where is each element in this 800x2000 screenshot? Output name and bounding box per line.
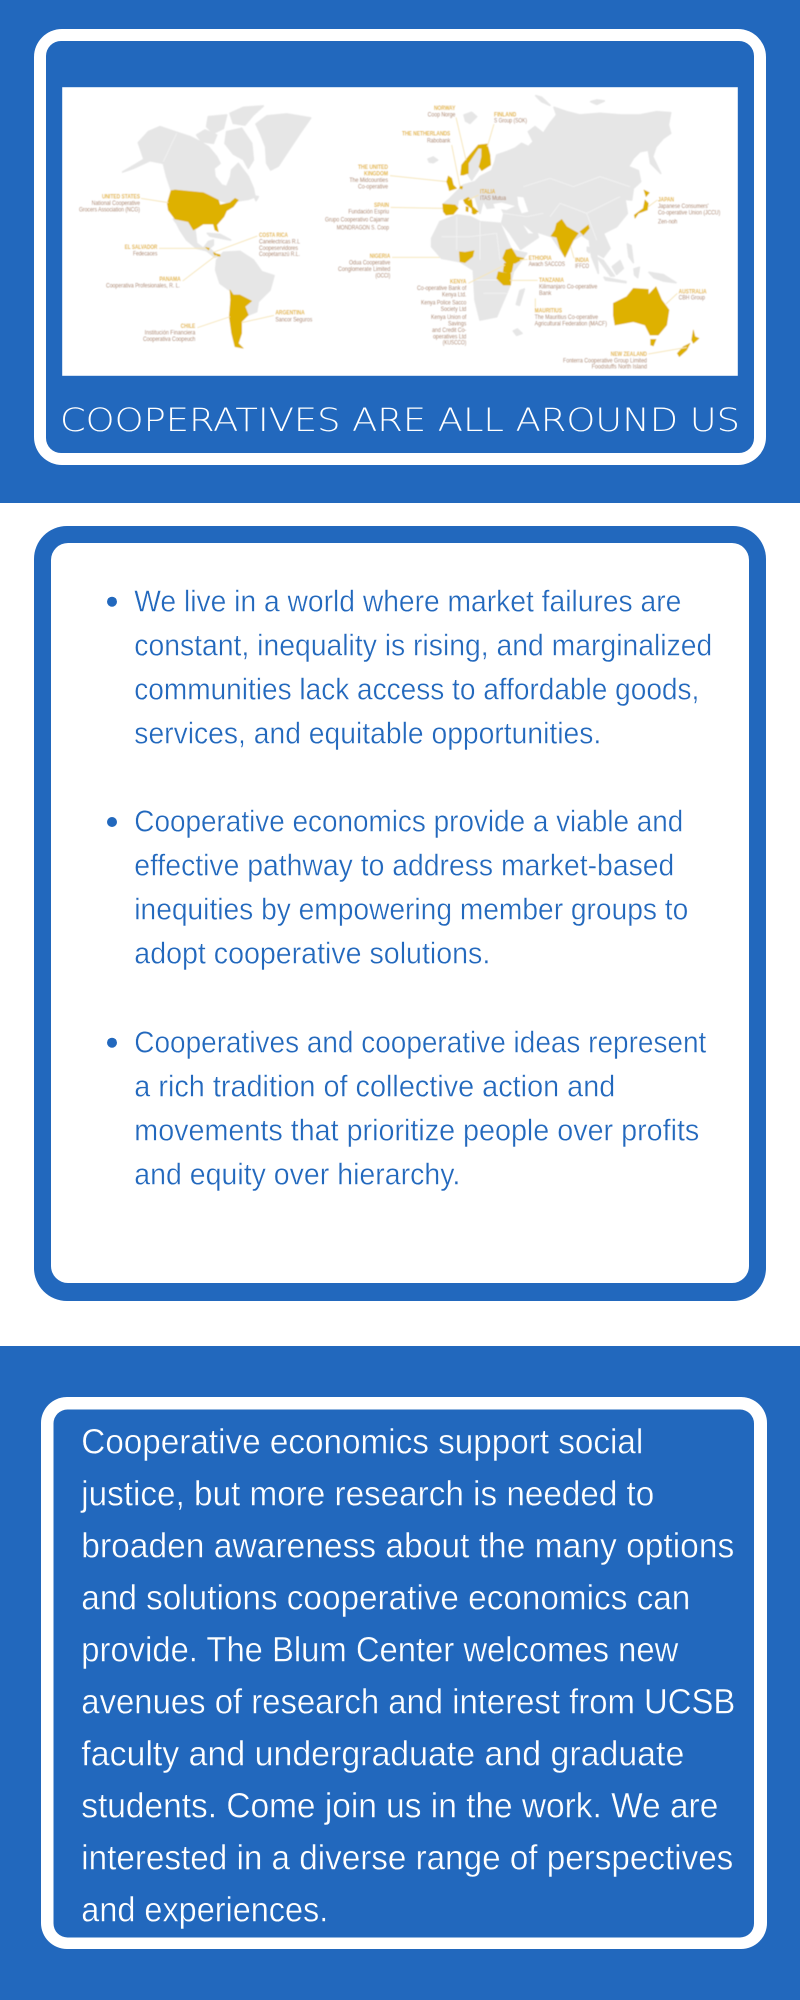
callout: El Salvador: Fedecaces (133, 250, 157, 257)
Spain highlighted (443, 204, 458, 215)
callout: Tanzania (510, 277, 598, 297)
callout: Mauritius (535, 298, 607, 327)
callout: Mauritius: The Mauritius Co-operative (535, 314, 598, 321)
callout: Nigeria: Conglomerate Limited (338, 266, 391, 273)
callout: United Kingdom: THE UNITED (358, 164, 388, 171)
callout: Panama (106, 255, 217, 290)
bullet: market failures: communities lack access to affordable goods, (134, 672, 699, 707)
callout: Kenya: Kenya Ltd. (442, 292, 467, 299)
call to action text (80, 1422, 735, 1929)
callout: Italia: ITAS Mutua (480, 195, 506, 202)
callout: Kenya: Co-operative Bank of (417, 285, 467, 292)
callout: United States (79, 194, 168, 213)
call to action text: broaden awareness about the many options (81, 1526, 734, 1565)
bullet: viable pathway: effective pathway to address market-based (134, 848, 674, 883)
world map (62, 87, 738, 376)
callout: Kenya: Kenya Police Sacco (421, 299, 467, 306)
panel: call to action (41, 1397, 767, 1949)
callout: The Netherlands: THE NETHERLANDS (402, 131, 450, 138)
callout: Japan: Co-operative Union (JCCU) (658, 209, 720, 216)
callout: Costa Rica (213, 232, 300, 258)
callout: Chile: CHILE (181, 323, 195, 330)
El Salvador, Costa Rica and Panama highlighted (206, 247, 220, 256)
callout: New Zealand: NEW ZEALAND (611, 351, 647, 358)
callout: Australia: AUSTRALIA (679, 288, 707, 295)
callout: Spain: Grupo Cooperativo Cajamar (325, 217, 389, 224)
callout: Australia (666, 288, 707, 304)
callout: Spain: MONDRAGON S. Coop (337, 225, 389, 232)
call to action text: justice, but more research is needed to (80, 1474, 654, 1513)
callout: Norway (428, 105, 466, 160)
top banner (0, 0, 800, 503)
callout: Kenya (417, 265, 505, 347)
callout: Nigeria: NIGERIA (370, 253, 391, 260)
callout: New Zealand: Foodstuffs North Island (592, 364, 647, 371)
callout: Tanzania: TANZANIA (539, 277, 564, 284)
bullet: rich tradition (107, 1025, 707, 1192)
bullet: market failures (107, 584, 712, 751)
callout: Ethiopia: Awach SACCOS (529, 261, 565, 268)
India highlighted (551, 219, 589, 257)
callout: Kenya: (KUSCCO) (443, 340, 466, 347)
callout: Ethiopia (520, 255, 565, 268)
callout: Italia: ITALIA (480, 189, 496, 196)
callout: New Zealand: Fonterra Cooperative Group Limited (563, 357, 647, 364)
call to action text: Cooperative economics support social (81, 1422, 643, 1461)
callout: Costa Rica: Coopeservidores (259, 245, 298, 252)
South America land (216, 251, 274, 315)
callout: Kenya: Savings (448, 320, 466, 327)
callout: India (571, 247, 589, 270)
callout: Kenya: and Credit Co- (432, 327, 466, 334)
callout: Nigeria: (OCCI) (375, 272, 390, 279)
Italy highlighted (463, 197, 478, 214)
bullet: market failures: services, and equitable opportunities. (134, 716, 601, 751)
map: Eurasia, Africa and Oceania (402, 96, 720, 371)
callout: Panama: Cooperativa Profesionales, R. L. (106, 283, 180, 290)
callout: India: INDIA (575, 257, 589, 264)
callout: Kenya: KENYA (450, 279, 467, 286)
callout: Ethiopia: ETHIOPIA (529, 255, 552, 262)
callout: New Zealand (563, 347, 687, 371)
callout: Australia: CBH Group (679, 295, 705, 302)
callout: Chile: Cooperativa Coopeuch (143, 336, 196, 343)
title: COOPERATIVES ARE ALL AROUND US (60, 401, 740, 439)
call to action text: avenues of research and interest from UCSB (81, 1682, 735, 1721)
callout: Finland: FINLAND (494, 111, 517, 118)
callout: Spain: SPAIN (374, 202, 389, 209)
Chile and Argentina highlighted (229, 290, 252, 348)
bullet: rich tradition: a rich tradition of collective action and (134, 1069, 615, 1104)
call to action text: and solutions cooperative economics can (81, 1578, 690, 1617)
call to action text: students. Come join us in the work. We are (81, 1786, 718, 1825)
bullet: viable pathway (107, 804, 688, 971)
callout: Costa Rica: Canelectricas R.L (259, 238, 300, 245)
Southeast Asia islands (587, 244, 676, 283)
callout: The Netherlands (402, 131, 460, 187)
Japan highlighted (634, 190, 649, 218)
callout: Nigeria (338, 253, 460, 279)
call to action text: faculty and undergraduate and graduate (81, 1734, 684, 1773)
callout: Costa Rica: Coopetarrazú R.L. (259, 251, 300, 258)
callout: United Kingdom: Co-operative (358, 183, 388, 190)
callout: Japan: JAPAN (658, 197, 674, 204)
callout: Norway: Coop Norge (428, 111, 456, 118)
Australia highlighted (613, 287, 669, 346)
United States highlighted (167, 190, 238, 232)
Eurasia land (428, 96, 671, 273)
callout: Italia (468, 189, 506, 202)
map: the Americas (79, 106, 460, 348)
callout: Kenya: operatives Ltd (433, 333, 467, 340)
panel: cooperative economics bullet points (34, 526, 766, 1301)
callout: Spain: Fundación Espriu (348, 208, 389, 215)
callout: United States: UNITED STATES (102, 194, 140, 201)
callout: El Salvador (125, 244, 206, 257)
callout: Argentina: ARGENTINA (275, 310, 305, 317)
callout: Spain (325, 202, 443, 232)
bullet: viable pathway: inequities by empowering member groups to (134, 892, 688, 927)
callout: Finland (487, 111, 527, 147)
callout: Nigeria: Odua Cooperative (349, 260, 391, 267)
callout: El Salvador: EL SALVADOR (125, 244, 158, 251)
Nigeria highlighted (459, 251, 474, 263)
call to action text: and experiences. (81, 1890, 328, 1929)
callout: United States: Grocers Association (NCG) (79, 206, 140, 213)
call to action text: interested in a diverse range of perspectives (81, 1838, 733, 1877)
Ethiopia, Kenya and Tanzania highlighted (497, 248, 524, 285)
panel: map frame (34, 29, 766, 465)
callout: Finland: S Group (SOK) (494, 118, 527, 125)
callout: Argentina (242, 310, 312, 323)
callout: Chile (143, 317, 230, 343)
bullet: rich tradition: and equity over hierarchy. (134, 1157, 460, 1192)
callout: Japan (648, 197, 720, 225)
callout: Japan: Zen-noh (658, 218, 678, 225)
callout: Norway: NORWAY (434, 105, 456, 112)
United Kingdom, Netherlands highlighted (447, 176, 463, 191)
callout: Kenya: Society Ltd (441, 306, 467, 313)
New Zealand highlighted (677, 330, 699, 357)
callout: The Netherlands: Rabobank (427, 137, 451, 144)
Norway highlighted (461, 144, 487, 175)
callout: Argentina: Sancor Seguros (275, 316, 312, 323)
bullet: viable pathway: Cooperative economics provide a viable and (134, 804, 683, 839)
bullet: viable pathway: adopt cooperative solutions. (134, 936, 490, 971)
callout: United Kingdom (349, 164, 447, 190)
callout: Mauritius: Agricultural Federation (MACF) (535, 320, 607, 327)
bullet: rich tradition: Cooperatives and cooperative ideas represent (134, 1025, 707, 1060)
bottom banner (0, 1346, 800, 2000)
callout: Mauritius: MAURITIUS (535, 308, 562, 315)
call to action text: provide. The Blum Center welcomes new (81, 1630, 679, 1669)
Finland highlighted (479, 145, 491, 171)
callout: Tanzania: Kilimanjaro Co-operative (539, 284, 598, 291)
callout: Chile: Institución Financiera (145, 329, 196, 336)
bullet: rich tradition: movements that prioritize people over profits (134, 1113, 699, 1148)
bullet: market failures: constant, inequality is rising, and marginalized (134, 628, 712, 663)
North America land (123, 106, 311, 257)
callout: Kenya: Kenya Union of (431, 314, 467, 321)
callout: United States: National Cooperative (92, 200, 140, 207)
callout: Japan: Japanese Consumers' (658, 203, 709, 210)
callout: Costa Rica: COSTA RICA (259, 232, 288, 239)
callout: Panama: PANAMA (159, 276, 181, 283)
Africa land (432, 215, 527, 335)
bullet: market failures: We live in a world where market failures are (134, 584, 681, 619)
callout: United Kingdom: KINGDOM (364, 170, 388, 177)
callout: India: IFFCO (575, 263, 589, 270)
callout: Tanzania: Bank (539, 290, 552, 297)
callout: United Kingdom: The Midcounties (349, 177, 388, 184)
